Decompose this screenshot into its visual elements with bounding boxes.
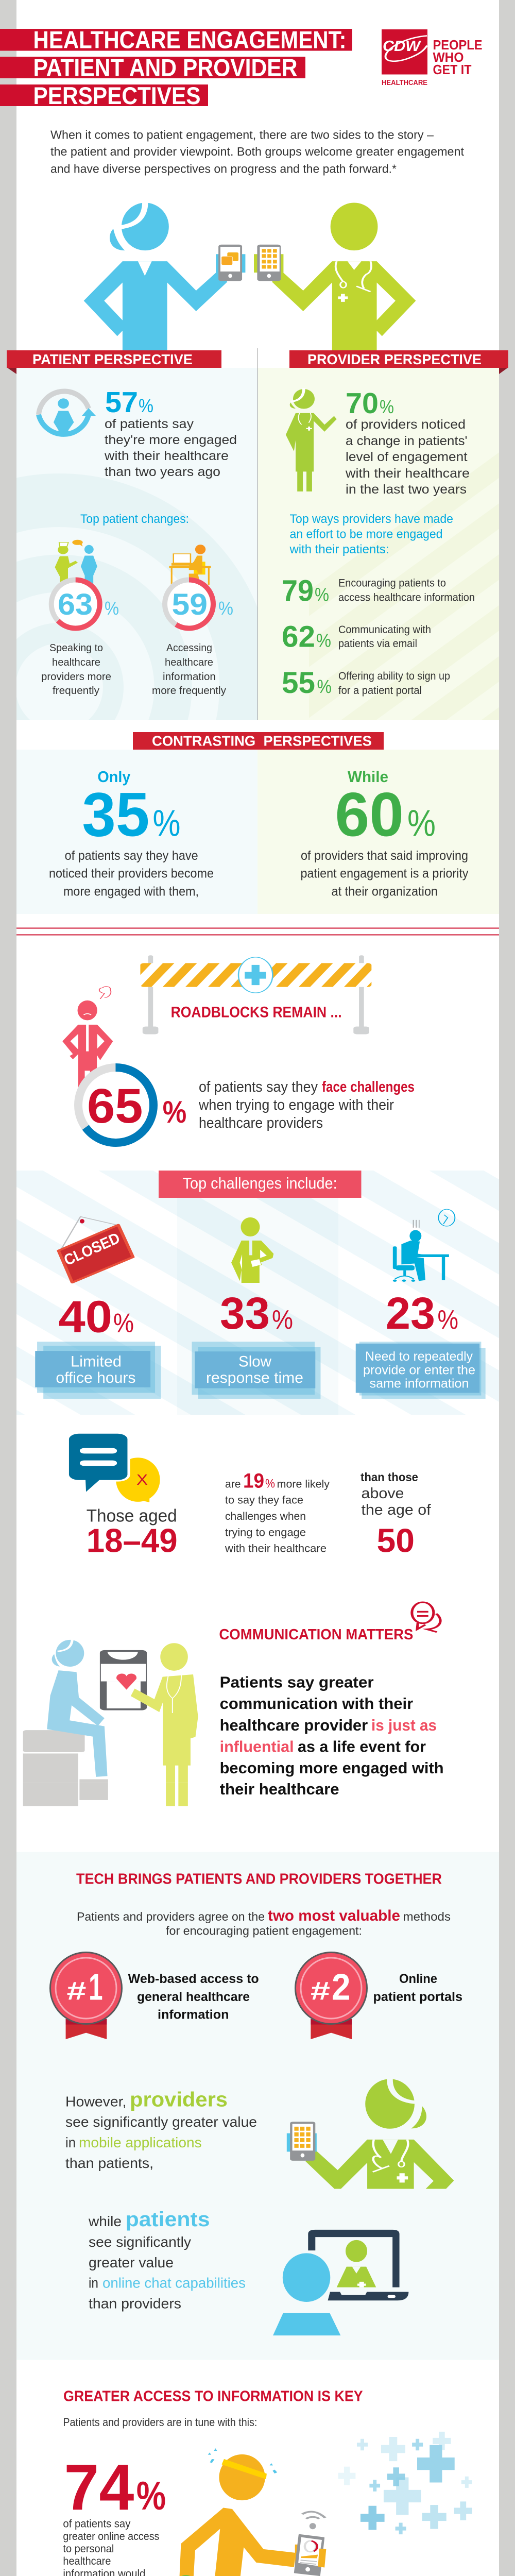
- text: 19% more likely: challenges when: [225, 1511, 306, 1522]
- stat: only 35% of patients: [49, 768, 214, 899]
- text: patients online chat: while: [88, 2213, 122, 2229]
- icon: road barrier: [140, 955, 372, 1035]
- text: patients online chat: [88, 2208, 246, 2312]
- stat: 57% of patients: than two years ago: [105, 465, 220, 479]
- stat: 79%: 79: [282, 574, 314, 607]
- heading: top ways providers: Top ways providers have made: [289, 512, 453, 526]
- stat: 74% of patients: 74: [64, 2451, 134, 2523]
- banner: top challenges include: [159, 1171, 362, 1198]
- heading: greater access to information: GREATER ACCESS TO INFORMATION IS KEY: [63, 2388, 363, 2404]
- stat: 57% of patients: 57: [105, 386, 138, 419]
- stat: 23% repeat information: Need to repeatedly: [365, 1349, 473, 1364]
- icon: medical crosses: [338, 2432, 472, 2534]
- stat: 70% of providers: in the last two years: [346, 482, 467, 497]
- stat: 33% slow response time: [192, 1289, 320, 1399]
- text: 65% face challenges: of patients say they: [199, 1079, 318, 1095]
- stat: while 60% of providers: at their organization: [332, 885, 438, 899]
- stat: 55%: for a patient portal: [338, 685, 422, 697]
- stat: 74% of patients: of patients say: [63, 2518, 131, 2530]
- heading: top ways providers: with their patients:: [289, 543, 389, 556]
- medal: #1: #: [67, 1976, 87, 2005]
- text: patients online chat: in: [89, 2275, 98, 2291]
- stat: 79%: access healthcare information: [338, 591, 475, 603]
- text: two most valuable: for encouraging patient engagement:: [166, 1924, 362, 1938]
- text: providers mobile applications: than patients,: [65, 2155, 153, 2171]
- logo: CDW People Who Get It: GET IT: [433, 62, 472, 77]
- text: those aged 18-49: [87, 1506, 178, 1559]
- stat: 74% of patients: to personal: [63, 2543, 114, 2555]
- intro text: When it comes to patient engagement, there are two sides to the story –: [50, 128, 434, 141]
- heading: communication matters: COMMUNICATION MATTERS: [219, 1626, 413, 1643]
- text: accessing information: [152, 642, 226, 697]
- text: patients online chat: online chat capabilities: [102, 2275, 246, 2291]
- stat: 79%: Encouraging patients to: [338, 578, 446, 589]
- stat: only 35% of patients: Only: [97, 768, 131, 786]
- text: providers mobile applications: mobile applications: [79, 2134, 202, 2150]
- banner: provider perspective: PROVIDER PERSPECTIVE: [307, 351, 482, 367]
- stat: 70% of providers: [345, 387, 470, 497]
- stat: 40% limited office hours: Limited: [71, 1353, 122, 1370]
- icon: woman at laptop desk: [169, 545, 211, 585]
- stat: 62%: 62: [282, 620, 315, 654]
- heading: greater access to information: [63, 2388, 363, 2429]
- stat: while 60% of providers: While: [348, 768, 388, 786]
- text: patients online chat: than providers: [89, 2296, 181, 2312]
- heading: top ways providers: an effort to be more engaged: [289, 528, 443, 541]
- stat: 40% limited office hours: office hours: [56, 1369, 135, 1386]
- icon: provider standing: [286, 388, 337, 492]
- stat: 79%: %: [315, 584, 329, 605]
- stat: 79%: [282, 574, 475, 607]
- stat: 33% slow response time: %: [272, 1305, 293, 1335]
- stat: 70% of providers: a change in patients': [346, 434, 468, 448]
- text: providers mobile applications: However,: [65, 2094, 127, 2110]
- heading: communication matters: [219, 1602, 440, 1643]
- logo: CDW People Who Get It: PEOPLE: [433, 37, 482, 53]
- heading: greater access to information: Patients and providers are in tune with this:: [63, 2416, 257, 2429]
- stat: while 60% of providers: [301, 768, 469, 899]
- icon: closed sign: [59, 1216, 133, 1282]
- medal: #1: 1: [89, 1967, 103, 2008]
- provider figure with tablet: [254, 203, 416, 353]
- stat: 57% of patients: %: [139, 395, 153, 416]
- text: 65% face challenges: [198, 1079, 415, 1131]
- heading: roadblocks remain: ROADBLOCKS REMAIN ...: [171, 1004, 342, 1021]
- title: PATIENT AND PROVIDER: [33, 54, 298, 81]
- medal: #2: 2: [332, 1967, 350, 2008]
- divider lines: [16, 927, 499, 936]
- stat: only 35% of patients: noticed their providers become: [49, 867, 214, 881]
- stat: 62%: [282, 620, 431, 654]
- heading: top patient changes: Top patient changes:: [80, 512, 189, 526]
- stat: 55%: 55: [282, 666, 315, 700]
- intro text: and have diverse perspectives on progress and the path forward.*: [50, 162, 397, 175]
- text: speaking to providers: frequently: [53, 685, 99, 697]
- text: than those above 50: the age of: [362, 1502, 431, 1518]
- icon: runner with phone: [148, 2448, 326, 2576]
- banner: top challenges include: Top challenges include:: [183, 1174, 337, 1192]
- chart: ring 59%: %: [218, 598, 233, 619]
- text: two most valuable: two most valuable: [268, 1907, 400, 1924]
- text: two most valuable: methods: [403, 1910, 451, 1923]
- stat: 62%: patients via email: [338, 638, 417, 650]
- stat: while 60% of providers: 60: [335, 779, 404, 849]
- icon: nurse speaking with patient: [55, 540, 97, 585]
- banner: patient perspective: PATIENT PERSPECTIVE: [32, 351, 193, 367]
- text: providers mobile applications: providers: [130, 2089, 228, 2111]
- panel: provider perspective background: [258, 348, 499, 720]
- text: online patient portals: [373, 1972, 462, 2004]
- icon: closed sign: CLOSED: [61, 1229, 123, 1269]
- text: 65% face challenges: healthcare providers: [199, 1115, 323, 1131]
- text: than those above 50: above: [362, 1485, 404, 1502]
- chart: ring 59%: [165, 580, 233, 629]
- stat: 55%: Offering ability to sign up: [338, 670, 450, 682]
- text: providers mobile applications: see significantly greater value: [65, 2114, 257, 2130]
- stat: 70% of providers: level of engagement: [346, 450, 468, 464]
- stat: 33% slow response time: 33: [220, 1289, 270, 1338]
- text: 65% face challenges: face challenges: [322, 1079, 415, 1095]
- chart: ring 65%: 65: [87, 1079, 143, 1133]
- text: accessing information: more frequently: [152, 685, 226, 697]
- medal: #1: [50, 1953, 122, 2039]
- text: two most valuable: Patients and providers agree on the: [77, 1910, 265, 1923]
- stat: 23% repeat information: [356, 1289, 486, 1399]
- text: communication message: [220, 1673, 444, 1798]
- stat: 33% slow response time: Slow: [238, 1353, 271, 1370]
- icon: person at desk with clock: [393, 1209, 455, 1282]
- text: accessing information: information: [163, 671, 216, 683]
- text: 19% more likely: with their healthcare: [225, 1543, 327, 1555]
- text: 19% more likely: [225, 1469, 330, 1555]
- stat: 23% repeat information: 23: [386, 1289, 435, 1338]
- text: providers mobile applications: in: [65, 2134, 76, 2150]
- text: web-based access: [128, 1972, 259, 2022]
- text: 19% more likely: more likely: [277, 1479, 330, 1490]
- icon: nurse with tablet: [287, 2078, 454, 2189]
- stat: 40% limited office hours: [35, 1292, 161, 1399]
- text: communication message: becoming more engaged with: [220, 1759, 444, 1777]
- title: HEALTHCARE ENGAGEMENT:: [33, 26, 346, 53]
- stat: 23% repeat information: same information: [370, 1377, 469, 1391]
- title: [0, 26, 352, 109]
- patient figure with phone: [84, 201, 245, 353]
- panel: patient perspective background: [16, 368, 258, 720]
- text: communication message: healthcare provider: [220, 1716, 368, 1734]
- stat: 23% repeat information: provide or enter the: [363, 1363, 475, 1378]
- stat: 55%: %: [317, 676, 332, 697]
- icon label: bubble X: X: [136, 1472, 148, 1488]
- text: communication message: as a life event for: [298, 1738, 426, 1756]
- stat: while 60% of providers: patient engagement is a priority: [301, 867, 469, 881]
- intro text: [50, 128, 465, 175]
- stat: 74% of patients: healthcare: [63, 2555, 111, 2567]
- icon: patient video call with provider on laptop: [273, 2230, 408, 2335]
- panel: contrasting perspectives: [16, 732, 499, 914]
- text: than those above 50: [360, 1470, 431, 1559]
- text: 19% more likely: trying to engage: [225, 1527, 306, 1538]
- chart: ring 65%: [78, 1067, 186, 1143]
- chart: ring 65%: %: [163, 1095, 186, 1129]
- stat: 62%: %: [316, 630, 331, 651]
- stat: 70% of providers: with their healthcare: [345, 466, 470, 481]
- text: providers mobile applications: [65, 2089, 257, 2171]
- chart: ring 63%: [52, 580, 119, 629]
- panel: top challenges background: [16, 1171, 499, 1415]
- stat: 55%: [282, 666, 450, 700]
- stat: 33% slow response time: response time: [206, 1369, 303, 1386]
- stat: 40% limited office hours: %: [113, 1309, 134, 1338]
- stat: while 60% of providers: %: [407, 803, 436, 844]
- text: web-based access: Web-based access to: [128, 1972, 259, 1986]
- stat: only 35% of patients: more engaged with them,: [63, 885, 199, 899]
- chart: ring 63%: %: [105, 598, 119, 619]
- text: 19% more likely: %: [265, 1477, 275, 1491]
- text: 19% more likely: are: [225, 1479, 241, 1490]
- stat: 70% of providers: 70: [346, 387, 379, 420]
- stat: 70% of providers: of providers noticed: [346, 417, 466, 432]
- text: speaking to providers: healthcare: [52, 657, 100, 668]
- panel: contrasting perspectives: CONTRASTING PERSPECTIVES: [152, 733, 372, 749]
- text: 65% face challenges: when trying to engage with their: [198, 1097, 394, 1113]
- text: those aged 18-49: 18–49: [87, 1522, 178, 1559]
- text: communication message: influential: [220, 1738, 294, 1756]
- stat: 62%: Communicating with: [338, 624, 431, 636]
- icon: speech bubbles: [66, 1432, 160, 1502]
- text: two most valuable: [77, 1907, 451, 1938]
- logo: CDW People Who Get It: CDW: [383, 38, 422, 55]
- medal: #2: #: [311, 1976, 330, 2005]
- text: patients online chat: see significantly: [89, 2234, 191, 2250]
- stat: 74% of patients: greater online access: [63, 2530, 159, 2543]
- title: PERSPECTIVES: [33, 82, 201, 109]
- text: web-based access: general healthcare: [137, 1990, 250, 2004]
- stat: 74% of patients: [63, 2451, 166, 2576]
- icon: patient in progress ring: [39, 391, 96, 434]
- text: communication message: their healthcare: [220, 1780, 339, 1798]
- stat: 40% limited office hours: 40: [59, 1292, 112, 1342]
- text: 19% more likely: 19: [243, 1469, 264, 1492]
- icon: person checking watch: [231, 1217, 273, 1283]
- stat: 57% of patients: with their healthcare: [104, 449, 229, 463]
- icon: frustrated patient: [62, 987, 113, 1089]
- banner: provider perspective: [289, 350, 508, 374]
- stat: 23% repeat information: %: [438, 1305, 458, 1335]
- text: communication message: communication with their: [220, 1694, 413, 1713]
- banner: patient perspective: [7, 350, 221, 374]
- text: speaking to providers: providers more: [41, 671, 111, 683]
- stat: only 35% of patients: 35: [82, 779, 149, 849]
- chart: ring 59%: 59: [172, 588, 208, 621]
- stat: 70% of providers: %: [380, 396, 394, 417]
- stat: only 35% of patients: of patients say they have: [65, 849, 198, 863]
- text: online patient portals: Online: [399, 1972, 437, 1986]
- chart: ring 63%: 63: [58, 588, 93, 621]
- text: accessing information: Accessing: [166, 642, 212, 654]
- logo: CDW People Who Get It: HEALTHCARE: [382, 79, 427, 87]
- heading: tech: TECH BRINGS PATIENTS AND PROVIDERS TOGETHER: [76, 1871, 442, 1887]
- stat: 57% of patients: of patients say: [105, 417, 194, 431]
- text: communication message: Patients say greater: [220, 1673, 374, 1691]
- text: speaking to providers: [41, 642, 111, 697]
- stat: 74% of patients: %: [136, 2473, 166, 2518]
- stat: 57% of patients: [104, 386, 237, 479]
- text: web-based access: information: [158, 2008, 229, 2022]
- text: communication message: is just as: [371, 1716, 437, 1734]
- text: accessing information: healthcare: [165, 657, 213, 668]
- text: than those above 50: than those: [360, 1470, 418, 1484]
- text: those aged 18-49: Those aged: [87, 1506, 177, 1526]
- heading: top ways providers: [289, 512, 453, 556]
- text: than those above 50: 50: [377, 1522, 415, 1559]
- medal: #2: [296, 1953, 367, 2039]
- text: speaking to providers: Speaking to: [49, 642, 103, 654]
- text: patients online chat: patients: [126, 2208, 210, 2231]
- text: patients online chat: greater value: [89, 2255, 174, 2270]
- illustration: patient and doctor with clipboard: [23, 1639, 198, 1806]
- stat: while 60% of providers: of providers that said improving: [301, 849, 468, 863]
- logo: CDW People Who Get It: WHO: [433, 49, 464, 65]
- logo: CDW People Who Get It: [382, 29, 482, 87]
- text: 19% more likely: to say they face: [225, 1495, 303, 1506]
- intro text: the patient and provider viewpoint. Both groups welcome greater engagement: [50, 145, 465, 158]
- panel: tech brings patients and providers together: [16, 1852, 499, 2360]
- stat: only 35% of patients: %: [152, 803, 180, 844]
- text: online patient portals: patient portals: [373, 1990, 462, 2004]
- stat: 57% of patients: they're more engaged: [105, 433, 237, 447]
